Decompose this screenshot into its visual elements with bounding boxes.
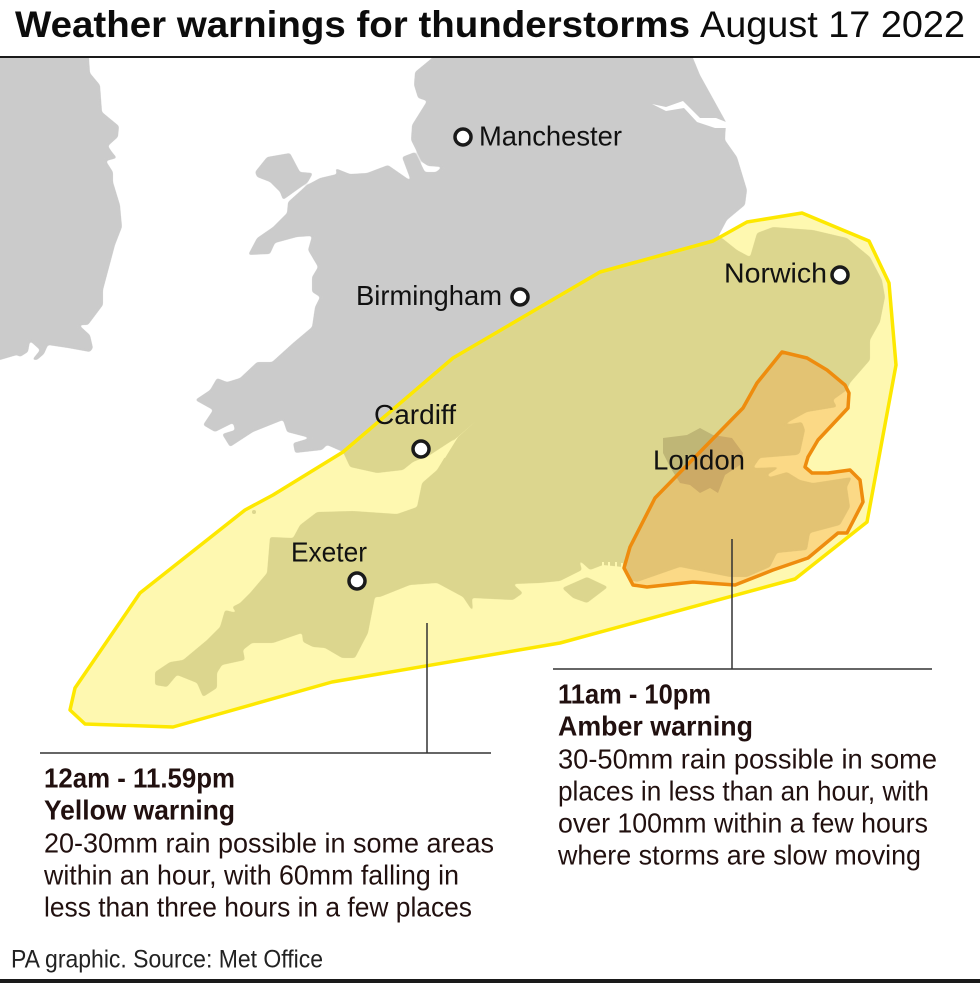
- city: Cardiff: Cardiff: [374, 399, 456, 430]
- Solent inlets: [602, 562, 623, 568]
- title: August 17 2022: [700, 4, 965, 45]
- map: [0, 45, 896, 727]
- callout: yellow warning: within an hour, with 60mm falling in: [43, 860, 459, 890]
- city: London: London: [653, 444, 745, 476]
- city: Manchester: Manchester: [479, 120, 622, 152]
- city: Norwich: Norwich: [724, 258, 827, 288]
- yellow warning outline: [70, 213, 896, 727]
- callout: amber warning: 11am - 10pm: [558, 678, 711, 710]
- Severn estuary tip: [444, 428, 468, 458]
- callout: yellow warning: 20-30mm rain possible in some areas: [44, 828, 494, 858]
- land: Great Britain: [196, 58, 747, 453]
- London shape: [663, 428, 714, 475]
- yellow warning area: [70, 213, 896, 727]
- leader: amber warning: [553, 539, 932, 669]
- amber warning outline: [624, 352, 863, 587]
- Lundy island: [252, 510, 256, 514]
- callout: yellow warning: 12am - 11.59pm: [44, 762, 235, 794]
- land: Ireland: [0, 45, 122, 362]
- source credit: PA graphic. Source: Met Office: [11, 946, 323, 974]
- amber warning area: [633, 391, 862, 586]
- city: Exeter: Exeter: [291, 536, 367, 568]
- title: Weather warnings for thunderstorms: [15, 4, 690, 45]
- callout: amber warning: where storms are slow moving: [557, 840, 921, 870]
- callout: amber warning: 30-50mm rain possible in some: [558, 744, 937, 774]
- leader: yellow warning: [40, 623, 491, 753]
- callout: amber warning: over 100mm within a few hours: [558, 808, 928, 838]
- Humber estuary: [652, 101, 726, 128]
- callout: yellow warning: less than three hours in a few places: [44, 892, 472, 922]
- city: Exeter: [291, 536, 367, 589]
- title: [15, 4, 965, 45]
- callout: amber warning: Amber warning: [558, 710, 753, 742]
- city: Cardiff: [374, 399, 456, 457]
- callout: yellow warning: [43, 762, 494, 922]
- callout: amber warning: [557, 678, 937, 870]
- callout: amber warning: places in less than an hour, with: [558, 776, 929, 806]
- callout: yellow warning: Yellow warning: [44, 794, 235, 826]
- city: Birmingham: Birmingham: [356, 280, 502, 311]
- land inside amber area: [626, 354, 851, 582]
- land inside yellow area: [155, 227, 885, 696]
